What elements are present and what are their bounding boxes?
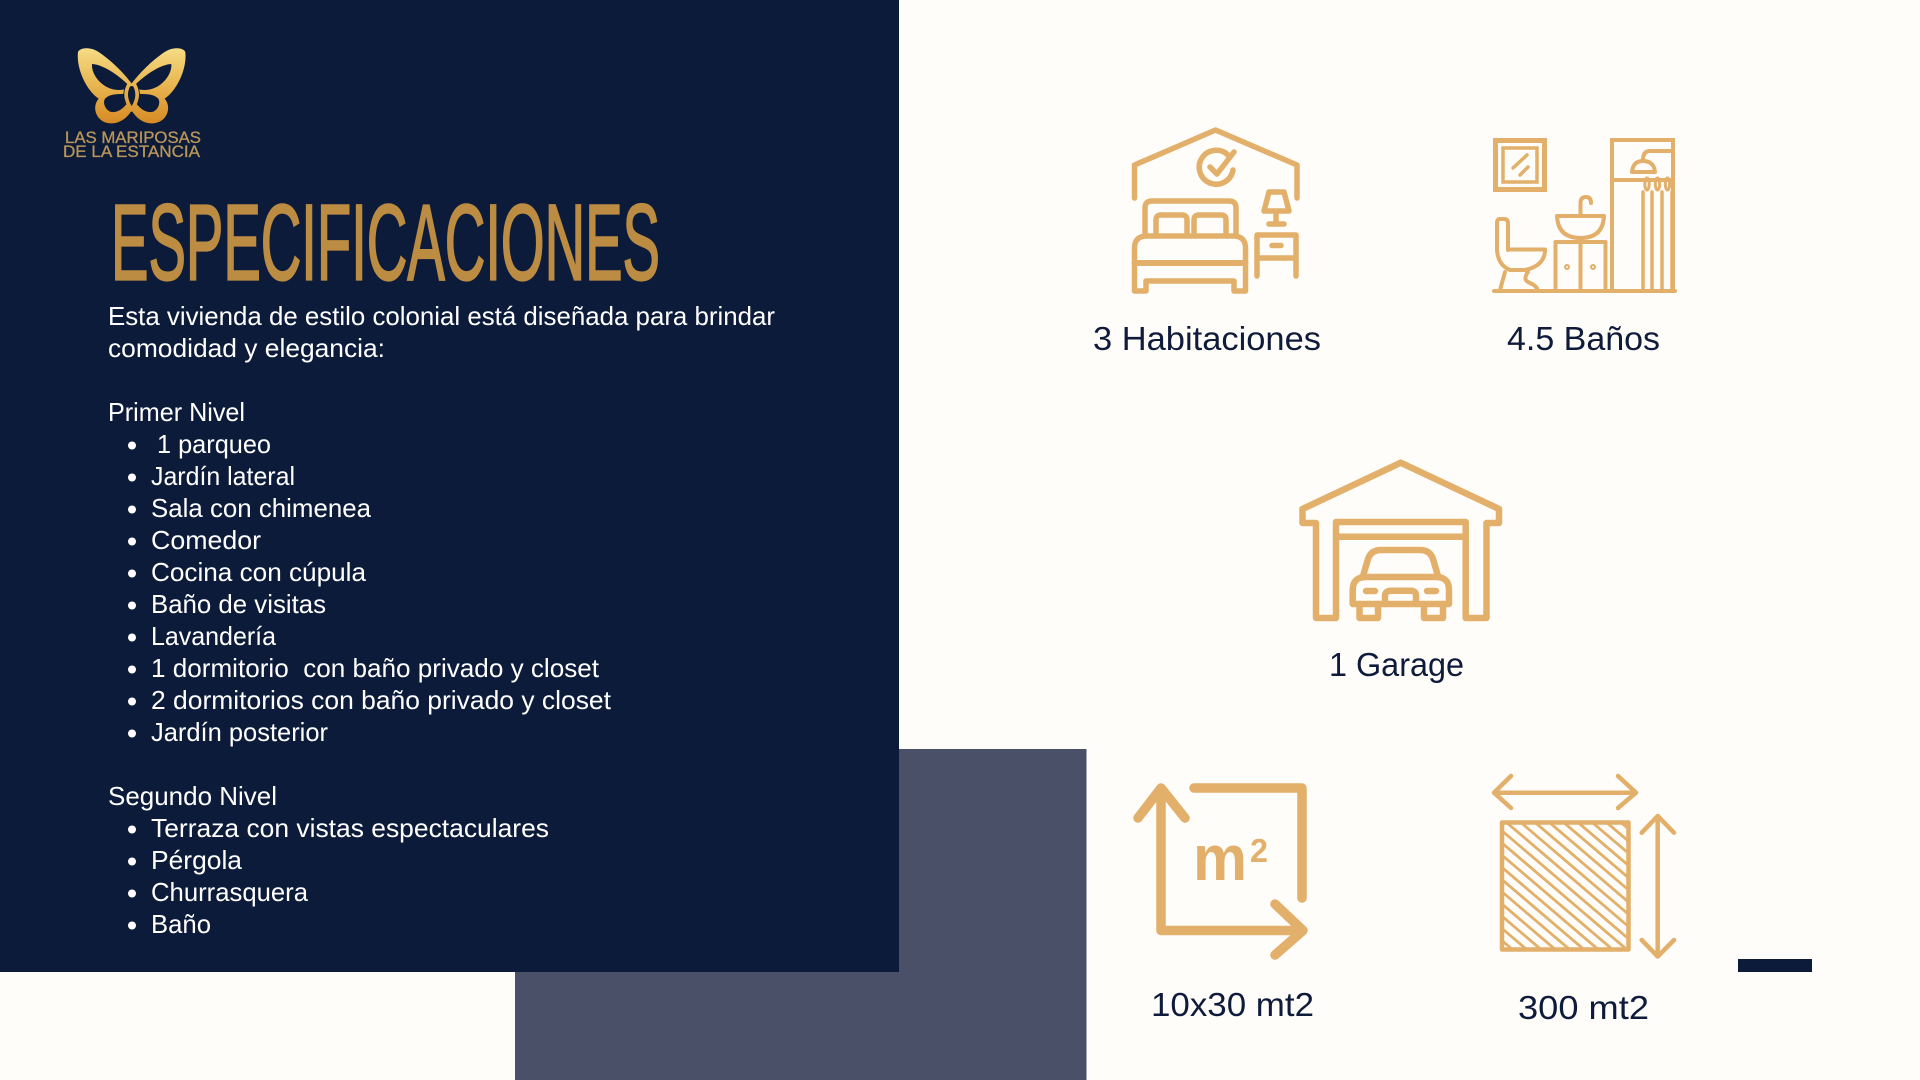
list: segundo nivel: Pérgola	[151, 845, 243, 875]
list: primer nivel: Cocina con cúpula	[151, 557, 367, 587]
heading: primer nivel: Primer Nivel	[108, 397, 245, 427]
list: primer nivel: Jardín lateral	[151, 461, 295, 491]
list: primer nivel: 2 dormitorios con baño privado y closet	[151, 685, 612, 715]
icon: square metres	[1138, 788, 1303, 955]
logo wordmark	[63, 129, 201, 161]
icon: square metres: 2	[1250, 832, 1268, 869]
intro paragraph: Esta vivienda de estilo colonial está diseñada para brindar	[108, 301, 775, 331]
list: primer nivel: 1 parqueo	[157, 429, 271, 459]
heading: segundo nivel: Segundo Nivel	[108, 781, 277, 811]
navy text panel	[0, 0, 899, 972]
list: primer nivel: Baño de visitas	[151, 589, 326, 619]
slate accent panel	[515, 749, 1086, 1080]
list: primer nivel	[128, 429, 612, 747]
list: primer nivel: 1 dormitorio con baño privado y closet	[151, 653, 600, 683]
label: 10x30 mt2: 10x30 mt2	[1151, 986, 1314, 1023]
label: 300 mt2: 300 mt2	[1518, 989, 1649, 1026]
icon: square metres: m	[1193, 822, 1247, 894]
label: 3 habitaciones: 3 Habitaciones	[1093, 320, 1321, 357]
list: primer nivel: Jardín posterior	[151, 717, 328, 747]
logo wordmark: DE LA ESTANCIA	[63, 143, 200, 161]
list: primer nivel: Comedor	[151, 525, 261, 555]
intro paragraph	[108, 301, 775, 363]
icon: bedroom	[1134, 130, 1297, 291]
list: primer nivel: Lavandería	[151, 621, 277, 651]
title: ESPECIFICACIONES	[111, 182, 660, 302]
logo wordmark: LAS MARIPOSAS	[65, 129, 201, 147]
label: 1 garage: 1 Garage	[1329, 646, 1464, 683]
label: 4.5 baños: 4.5 Baños	[1507, 320, 1660, 357]
list: segundo nivel: Terraza con vistas espectaculares	[151, 813, 549, 843]
icon: garage with car	[1302, 463, 1499, 618]
navy accent bar	[1738, 959, 1812, 972]
list: segundo nivel: Baño	[151, 909, 211, 939]
logo: Las Mariposas de la Estancia	[63, 48, 201, 161]
icon: surface area	[1492, 774, 1676, 959]
list: segundo nivel	[128, 813, 549, 939]
list: primer nivel: Sala con chimenea	[151, 493, 372, 523]
list: segundo nivel: Churrasquera	[151, 877, 309, 907]
intro paragraph: comodidad y elegancia:	[108, 333, 385, 363]
icon: butterfly	[78, 48, 186, 123]
icon: bathroom	[1494, 140, 1675, 291]
